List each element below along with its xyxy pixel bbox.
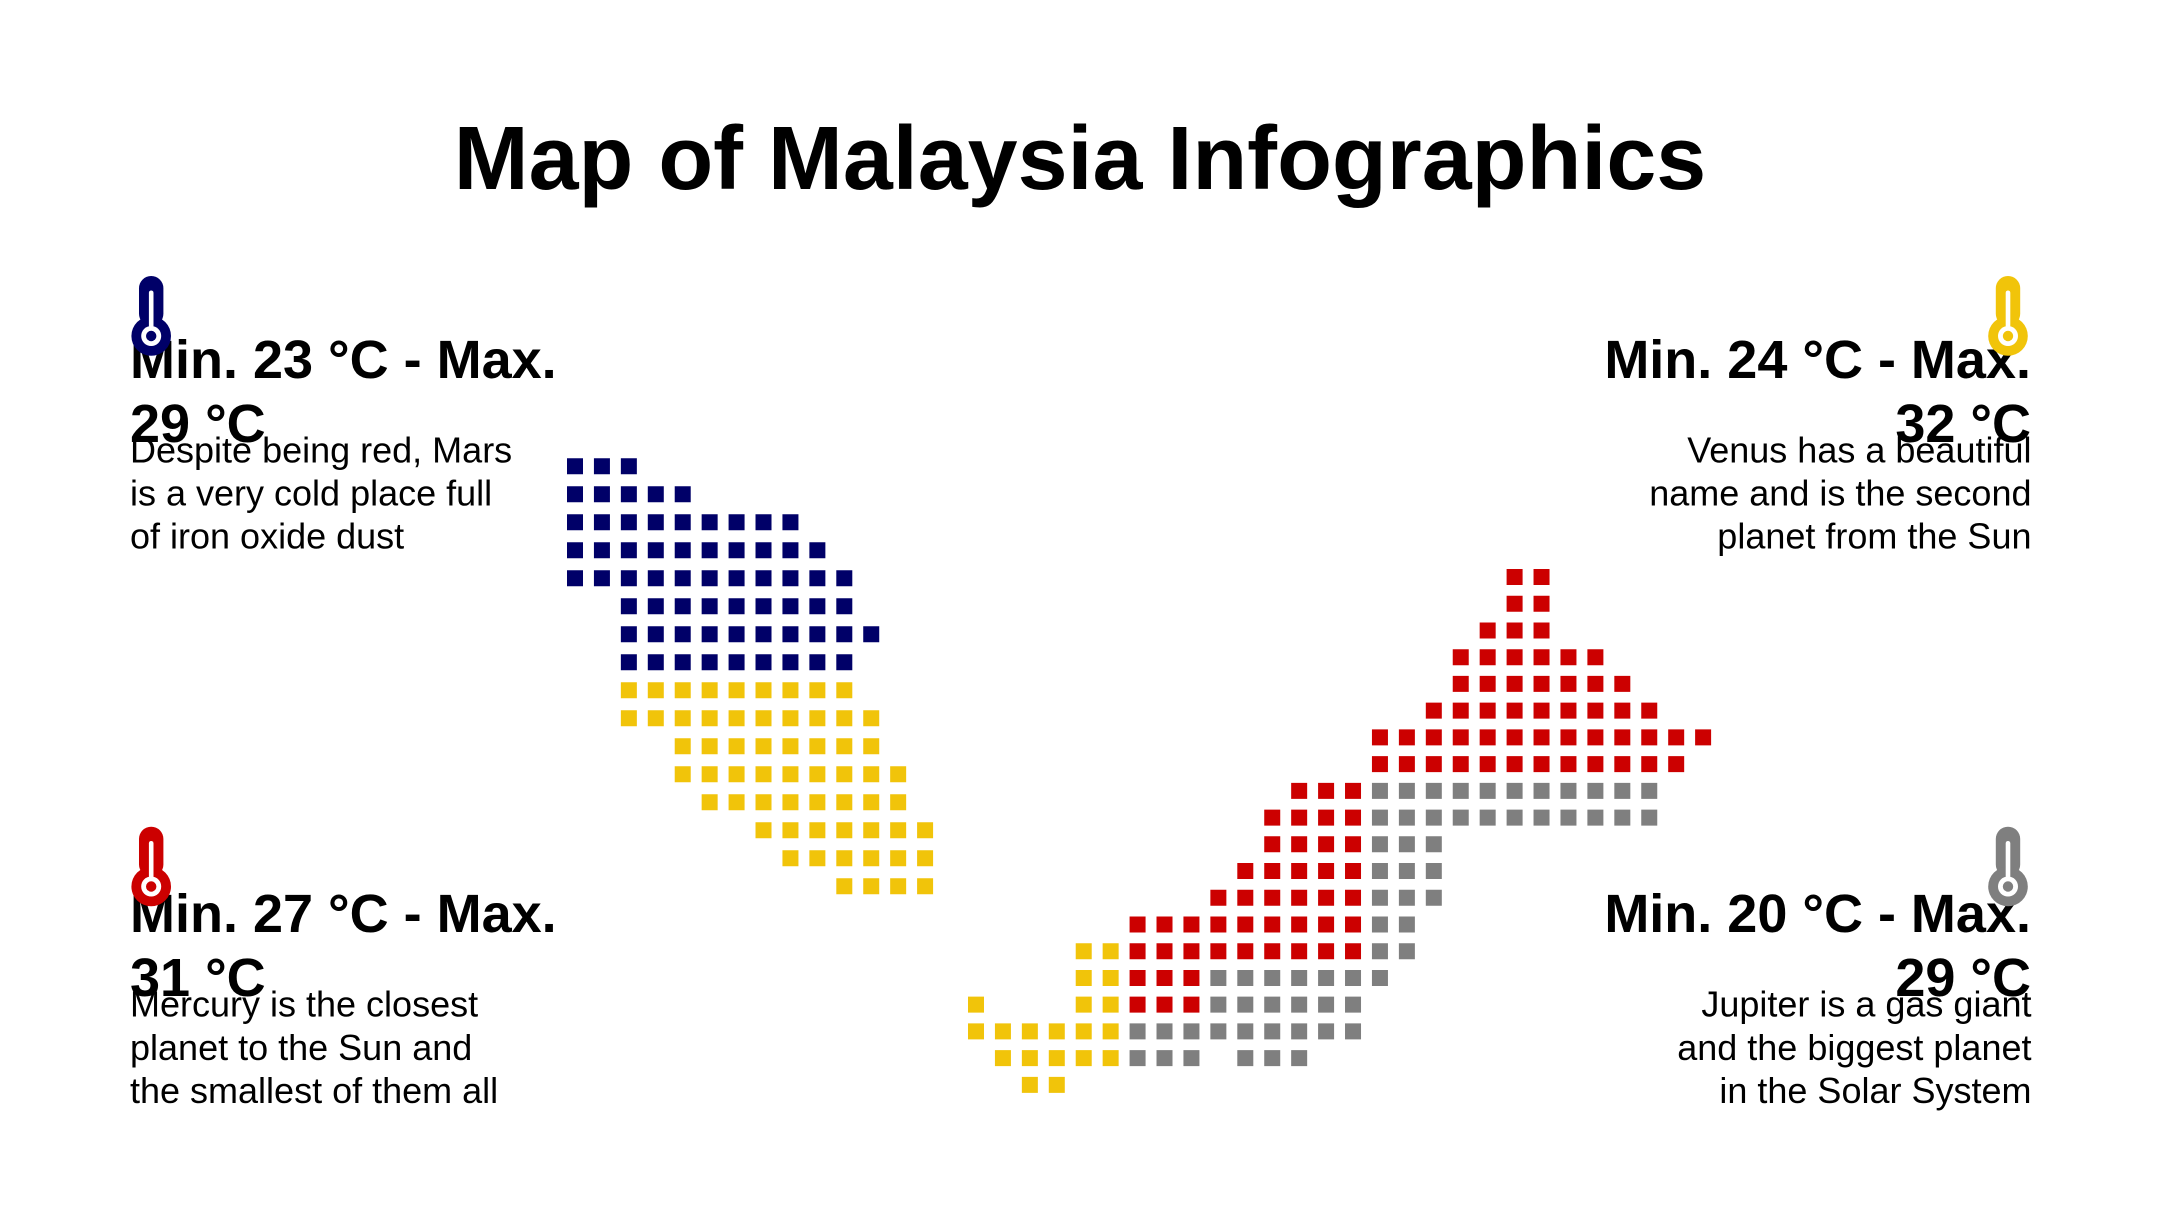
text block: bottom left: the smallest of them all [130,1070,498,1111]
heading: top right: Min. 24 °C - Max. [1604,330,2031,390]
text block: top right: planet from the Sun [1717,516,2032,556]
text block: top left: of iron oxide dust [130,516,404,556]
heading: bottom right: Min. 20 °C - Max. [1604,884,2031,944]
text block: top left: is a very cold place full [130,472,492,514]
text block: bottom left: planet to the Sun and [130,1027,472,1068]
heading: bottom left: Min. 27 °C - Max. [130,884,557,944]
map region: yellow peninsula south [621,690,933,886]
panel: top left temperature [130,276,557,556]
map region: gray east [1130,791,1657,1058]
text block: bottom left: Mercury is the closest [130,984,478,1024]
text block: top right: Venus has a beautiful [1687,430,2032,470]
map region: navy northwest [567,466,879,662]
icon: navy thermometer [131,276,171,356]
map region: red northeast [1130,577,1711,1005]
text block: top right: name and is the second [1649,472,2032,514]
title: Map of Malaysia Infographics [454,109,1706,209]
text block: top left: Despite being red, Mars [130,430,512,470]
text block: bottom right: Jupiter is a gas giant [1701,984,2032,1024]
icon: gray thermometer [1988,827,2028,906]
panel: bottom right temperature [1604,827,2032,1111]
heading: top left: Min. 23 °C - Max. [130,330,557,390]
heading: bottom left: 31 °C [130,948,266,1008]
heading: top right: 32 °C [1895,394,2031,454]
text block: bottom right: in the Solar System [1719,1070,2032,1111]
icon: yellow thermometer [1988,276,2028,356]
heading: top left: 29 °C [130,394,266,454]
icon: red thermometer [131,827,171,906]
map: dot-grid Malaysia [567,466,1711,1085]
text block: bottom right: and the biggest planet [1677,1027,2032,1068]
panel: top right temperature [1604,276,2032,556]
panel: bottom left temperature [130,827,557,1111]
map region: yellow southwest [968,951,1119,1085]
heading: bottom right: 29 °C [1895,948,2031,1008]
